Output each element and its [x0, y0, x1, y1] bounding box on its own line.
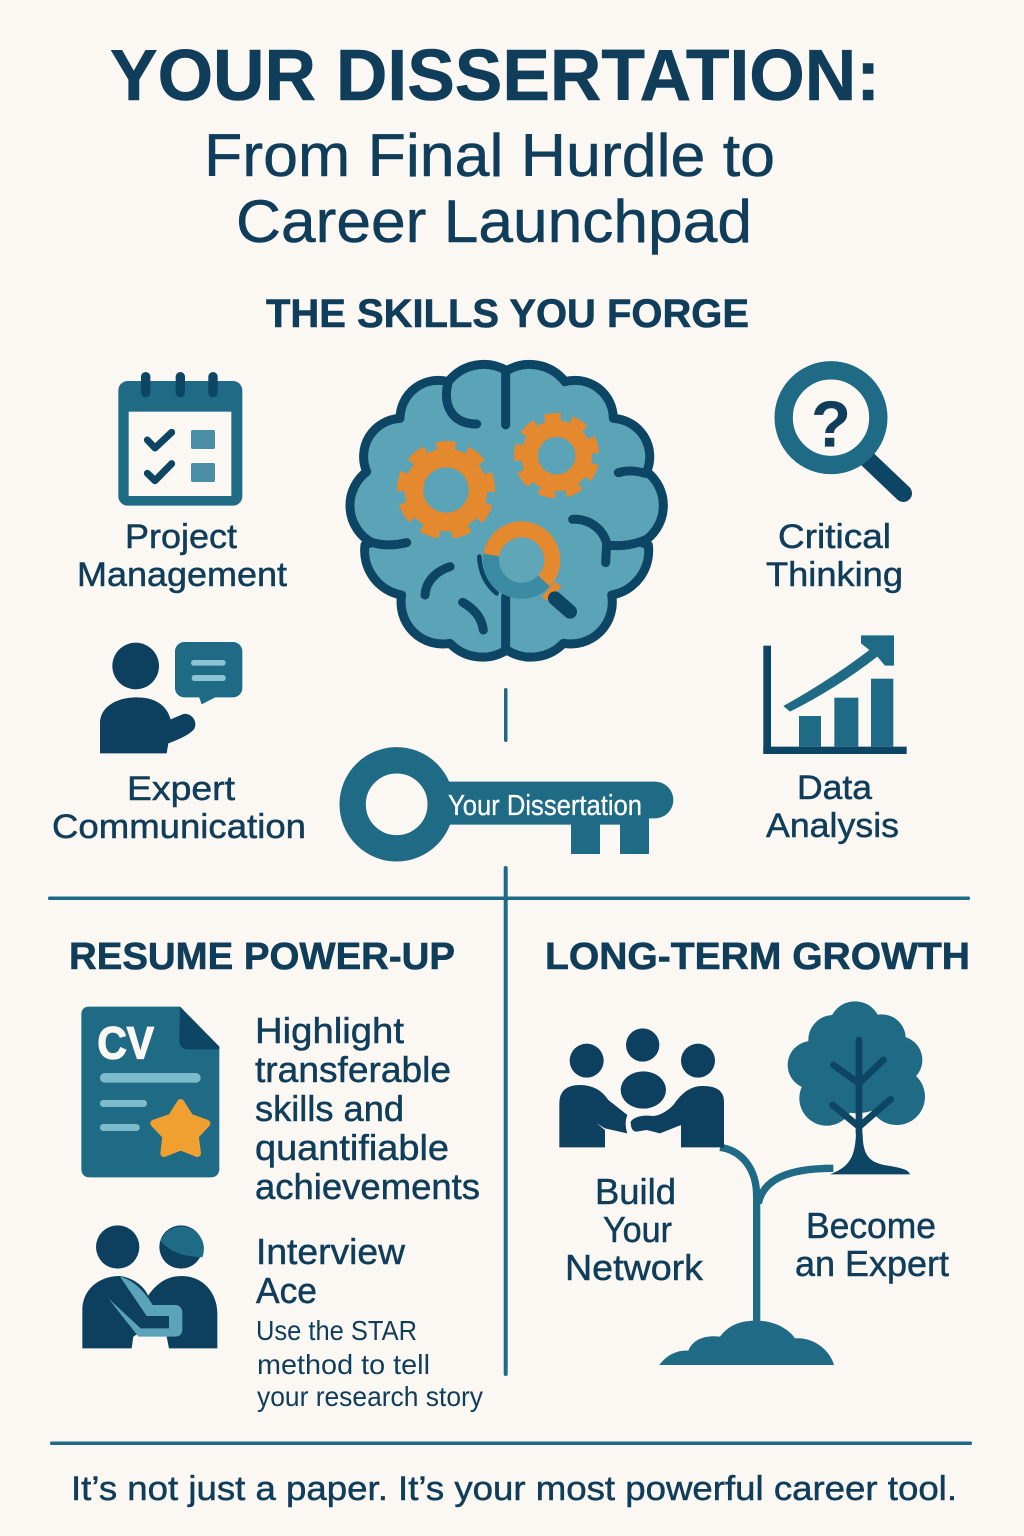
icon: brain with gears and magnifier — [350, 364, 663, 657]
label: expert communication: Communication — [52, 808, 306, 846]
title: YOUR DISSERTATION: — [110, 36, 880, 116]
text: interview ace: method to tell — [257, 1349, 430, 1380]
icon: person with speech bubble — [100, 642, 242, 753]
label: data analysis: Analysis — [766, 807, 899, 845]
title: Career Launchpad — [236, 188, 752, 255]
text: highlight transferable skills: skills and — [255, 1088, 404, 1129]
label: build your network — [565, 1171, 704, 1288]
label: project management: Project — [125, 518, 238, 556]
icon: cv document with star — [81, 1007, 219, 1177]
text: highlight transferable skills: transferable — [255, 1049, 451, 1090]
illustration: growth stem with network and tree — [559, 1001, 925, 1365]
heading: resume power-up: RESUME POWER-UP — [69, 936, 455, 978]
connector: brain to key — [504, 688, 508, 742]
label: build your network: Build — [595, 1171, 676, 1212]
text: interview ace: Use the STAR — [256, 1315, 417, 1346]
icon: bar chart with rising arrow — [763, 635, 907, 754]
horizontal divider — [48, 896, 970, 900]
heading: the skills you forge: THE SKILLS YOU FORGE — [266, 292, 749, 336]
text: highlight transferable skills: Highlight — [255, 1010, 404, 1051]
text: interview ace — [256, 1231, 483, 1412]
text: interview ace: Interview — [256, 1231, 406, 1272]
label: expert communication: Expert — [127, 770, 236, 808]
label: project management: Management — [77, 556, 288, 594]
label: build your network: Network — [565, 1247, 704, 1288]
title — [110, 36, 880, 255]
icon: tree — [788, 1001, 925, 1174]
icon: calendar checklist — [118, 372, 242, 506]
icon: two people shaking hands — [82, 1225, 217, 1348]
vertical divider — [504, 866, 508, 1376]
label: project management — [77, 518, 288, 594]
icon: key labelled your dissertation: Your Dissertation — [448, 790, 642, 822]
label: expert communication — [52, 770, 306, 846]
icon: magnifying glass with question mark: ? — [811, 388, 851, 461]
stem and branches — [720, 1147, 833, 1323]
text: highlight transferable skills: achievements — [255, 1166, 480, 1207]
icon: magnifying glass with question mark — [784, 370, 903, 493]
label: become an expert: an Expert — [795, 1243, 949, 1284]
footer divider — [50, 1442, 972, 1445]
text: highlight transferable skills: quantifiable — [255, 1127, 449, 1168]
icon: cv document with star: CV — [97, 1018, 154, 1069]
label: data analysis: Data — [797, 769, 872, 807]
text: interview ace: your research story — [257, 1381, 483, 1412]
icon: network of people — [559, 1028, 724, 1147]
title: From Final Hurdle to — [204, 122, 775, 189]
label: become an expert — [795, 1205, 949, 1284]
heading: long-term growth: LONG-TERM GROWTH — [545, 936, 970, 978]
text: interview ace: Ace — [256, 1270, 317, 1311]
label: critical thinking: Critical — [778, 518, 891, 556]
footer tagline: It’s not just a paper. It’s your most powerful career tool. — [71, 1470, 957, 1508]
icon: key labelled your dissertation — [353, 760, 673, 854]
label: become an expert: Become — [806, 1205, 936, 1246]
label: critical thinking — [766, 518, 903, 594]
label: critical thinking: Thinking — [766, 556, 903, 594]
mound — [659, 1321, 834, 1365]
label: build your network: Your — [603, 1209, 672, 1250]
label: data analysis — [766, 769, 899, 845]
text: highlight transferable skills — [255, 1010, 480, 1207]
